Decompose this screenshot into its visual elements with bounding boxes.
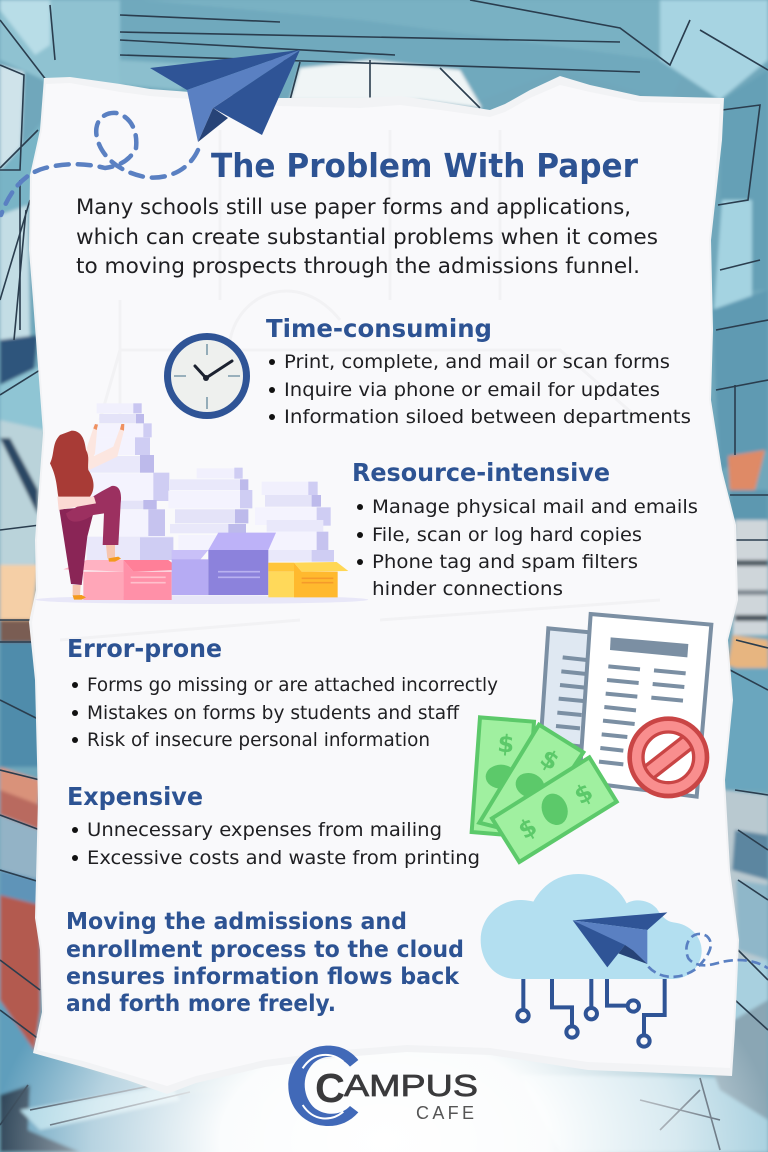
money bills: $ xyxy=(496,729,515,759)
section: time-consuming xyxy=(266,314,691,428)
section: time-consuming: Time-consuming xyxy=(266,314,492,343)
money bills: $ xyxy=(535,744,564,776)
illustration: woman stacking papers and boxes xyxy=(35,403,368,604)
section: error-prone: Error-prone xyxy=(67,634,222,663)
title: The Problem With Paper xyxy=(211,146,639,185)
intro text: which can create substantial problems when it comes xyxy=(76,225,658,250)
closing statement: ensures information flows back xyxy=(66,964,460,990)
paper stack left xyxy=(87,403,173,560)
intro text: to moving prospects through the admissions funnel. xyxy=(76,254,640,279)
intro text xyxy=(76,195,658,279)
closing statement: and forth more freely. xyxy=(66,991,336,1017)
paper stack middle xyxy=(168,468,252,550)
section: time-consuming: Inquire via phone or email for updates xyxy=(284,379,660,401)
icon: documents with prohibited sign and money xyxy=(472,614,711,862)
prohibited sign xyxy=(630,719,707,796)
money bills xyxy=(472,717,617,862)
woman xyxy=(50,424,124,600)
closing statement: enrollment process to the cloud xyxy=(66,937,464,963)
floor shadow xyxy=(35,595,368,604)
section: error-prone xyxy=(67,634,498,751)
logo: Campus Cafe xyxy=(288,1046,478,1126)
section: resource-intensive: File, scan or log hard copies xyxy=(372,524,642,546)
section: error-prone: Risk of insecure personal information xyxy=(87,729,430,751)
section: time-consuming: Information siloed between departments xyxy=(284,406,691,428)
pink box xyxy=(63,560,182,600)
paper stack right xyxy=(255,482,334,562)
purple box xyxy=(172,533,276,595)
section: resource-intensive: Manage physical mail and emails xyxy=(372,496,698,518)
money bills: $ xyxy=(569,778,598,810)
icon: cloud with circuit lines and plane xyxy=(481,874,768,1047)
section: expensive: Unnecessary expenses from mailing xyxy=(87,819,442,841)
icon: clock xyxy=(168,336,246,416)
section: expensive xyxy=(67,782,480,869)
intro text: Many schools still use paper forms and applications, xyxy=(76,195,631,220)
money bills: $ xyxy=(513,812,542,845)
section: time-consuming: Print, complete, and mail or scan forms xyxy=(284,351,670,373)
front document xyxy=(579,614,711,797)
logo: Campus Cafe: AMPUS xyxy=(344,1068,478,1103)
section: resource-intensive: Phone tag and spam filters xyxy=(372,551,638,573)
faint sketch texture on paper xyxy=(60,130,660,640)
section: resource-intensive: Resource-intensive xyxy=(352,458,610,487)
yellow box xyxy=(268,562,348,597)
section: error-prone: Forms go missing or are attached incorrectly xyxy=(87,674,498,696)
back document xyxy=(541,628,593,747)
section: error-prone: Mistakes on forms by students and staff xyxy=(87,702,460,724)
closing statement: Moving the admissions and xyxy=(66,909,407,935)
closing statement xyxy=(66,909,464,1017)
logo: Campus Cafe: C xyxy=(315,1065,345,1111)
logo: Campus Cafe: CAFE xyxy=(416,1103,474,1123)
section: expensive: Excessive costs and waste from printing xyxy=(87,847,480,869)
section: expensive: Expensive xyxy=(67,782,203,811)
icon: paper plane with dashed flight path xyxy=(1,50,300,215)
section: resource-intensive xyxy=(352,458,698,600)
section: resource-intensive: hinder connections xyxy=(372,578,563,600)
